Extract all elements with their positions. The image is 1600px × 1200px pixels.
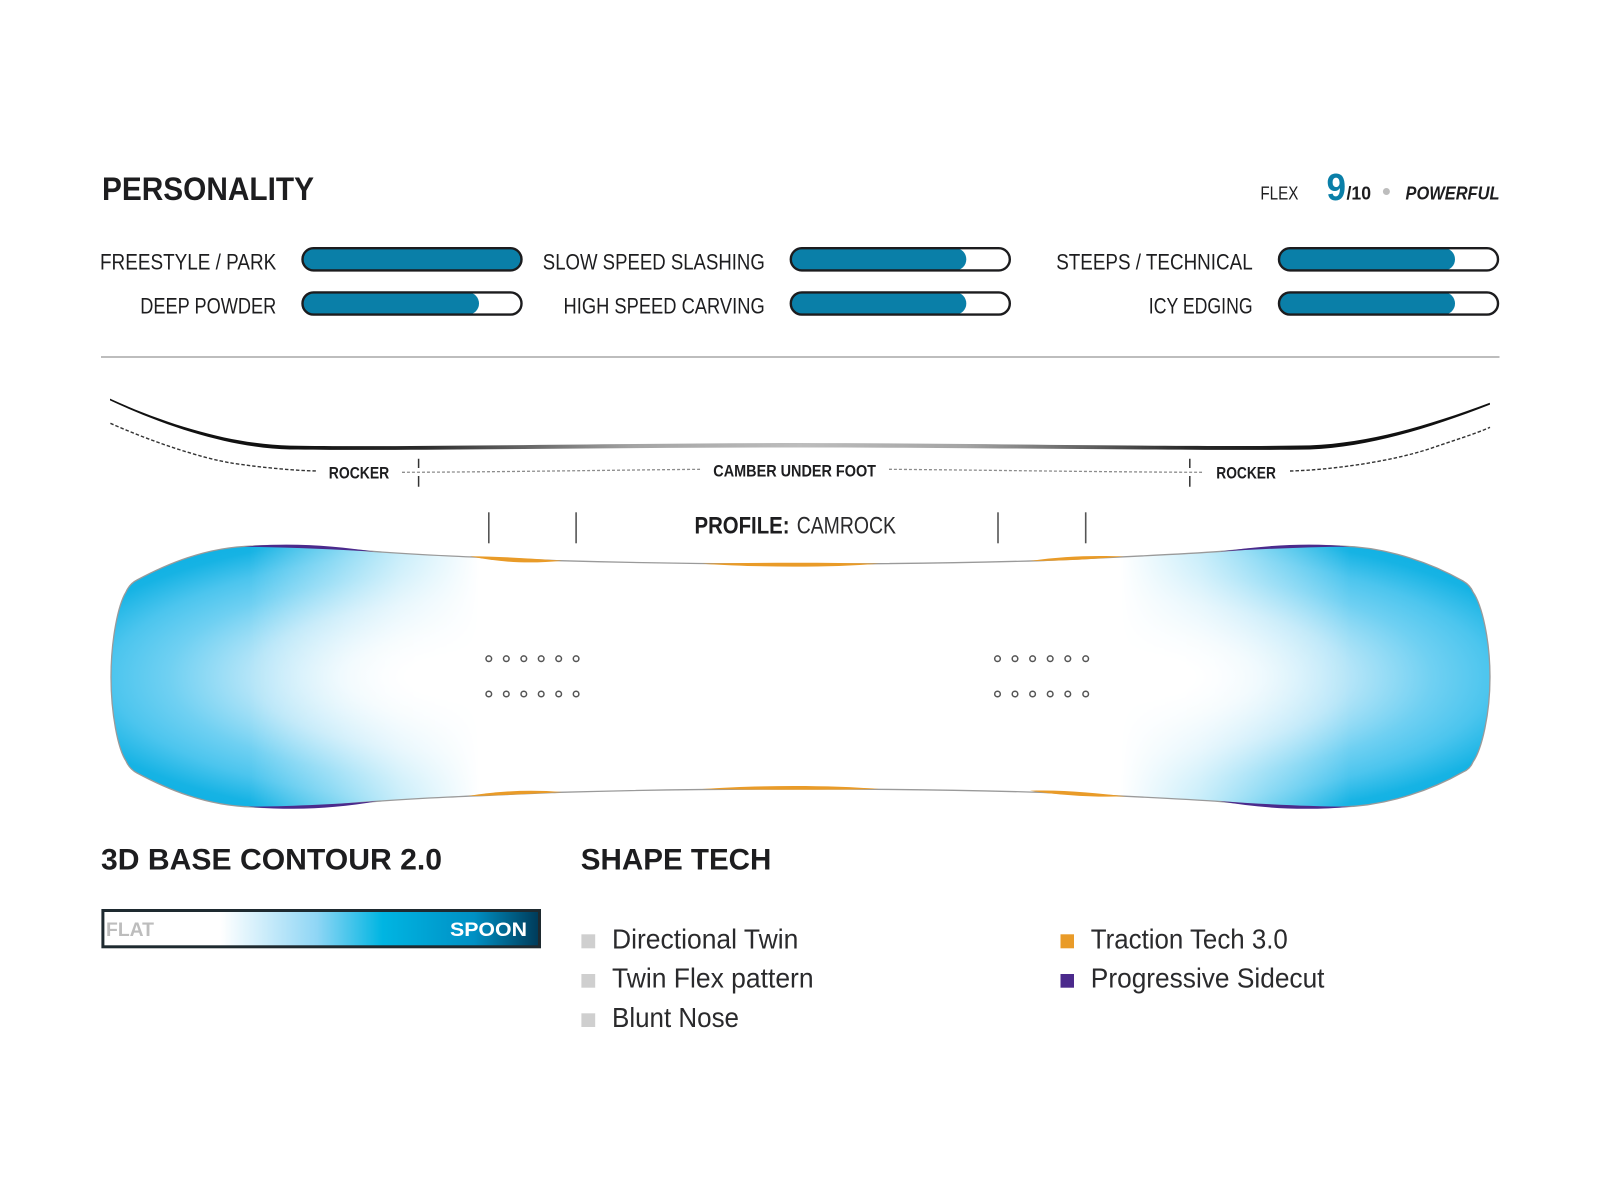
rating: freestyle / park: FREESTYLE / PARK bbox=[100, 250, 277, 274]
profile name: CAMROCK bbox=[797, 512, 896, 539]
binding inserts left bbox=[486, 656, 579, 697]
board base gradient bbox=[112, 546, 1490, 806]
rating: slow speed slashing bbox=[543, 248, 1010, 274]
contour scale bar bbox=[103, 910, 540, 947]
flex value 9: 9 bbox=[1326, 167, 1346, 209]
rating: slow speed slashing: SLOW SPEED SLASHING bbox=[543, 250, 765, 274]
dashed rocker line left bbox=[110, 423, 317, 471]
item: progressive sidecut: Progressive Sidecut bbox=[1091, 963, 1325, 994]
dashed rocker line right bbox=[1290, 427, 1490, 471]
heading: personality: PERSONALITY bbox=[102, 171, 314, 207]
rating: steeps / technical bbox=[1056, 248, 1498, 274]
rocker tick left bbox=[418, 459, 420, 487]
label: flat: FLAT bbox=[106, 919, 154, 941]
flex rating bbox=[1260, 167, 1500, 209]
binding inserts right bbox=[995, 656, 1088, 697]
panel: personality bbox=[100, 167, 1500, 318]
rating: high speed carving: HIGH SPEED CARVING bbox=[564, 294, 765, 318]
rating: high speed carving bbox=[564, 292, 1010, 318]
rocker tick right bbox=[1189, 459, 1191, 487]
traction tech segments bbox=[468, 556, 1126, 797]
item: traction tech: Traction Tech 3.0 bbox=[1091, 923, 1288, 954]
item: blunt nose: Blunt Nose bbox=[612, 1002, 739, 1033]
snowboard bbox=[110, 544, 1491, 809]
flex label: FLEX bbox=[1260, 182, 1298, 203]
flex descriptor: POWERFUL bbox=[1406, 182, 1500, 203]
progressive sidecut segments bbox=[244, 545, 1352, 809]
item: twin flex pattern: Twin Flex pattern bbox=[612, 963, 814, 994]
panel: shape tech bbox=[581, 843, 1325, 1033]
rating: deep powder: DEEP POWDER bbox=[140, 294, 276, 318]
heading: 3d base contour: 3D BASE CONTOUR 2.0 bbox=[101, 843, 442, 876]
rating: deep powder bbox=[140, 292, 522, 318]
label: spoon: SPOON bbox=[450, 919, 527, 941]
label: camber under foot: CAMBER UNDER FOOT bbox=[713, 462, 876, 480]
rating: freestyle / park bbox=[100, 248, 522, 274]
panel: 3d base contour bbox=[101, 843, 540, 947]
label: rocker left: ROCKER bbox=[329, 465, 389, 483]
profile title: PROFILE: bbox=[694, 512, 790, 539]
rating: icy edging: ICY EDGING bbox=[1149, 294, 1253, 318]
separator dot bbox=[1383, 188, 1390, 195]
stance ticks bbox=[489, 512, 1086, 543]
camber profile diagram bbox=[110, 399, 1490, 487]
dashed camber line left bbox=[402, 469, 702, 472]
rating: steeps / technical: STEEPS / TECHNICAL bbox=[1056, 250, 1253, 274]
flex scale /10: /10 bbox=[1346, 182, 1371, 203]
item: directional twin: Directional Twin bbox=[612, 923, 798, 954]
rating: icy edging bbox=[1149, 292, 1498, 318]
heading: shape tech: SHAPE TECH bbox=[581, 843, 771, 876]
dashed camber line right bbox=[889, 469, 1204, 472]
board outline bbox=[111, 545, 1490, 808]
profile curve bbox=[110, 399, 1490, 450]
label: rocker right: ROCKER bbox=[1216, 465, 1276, 483]
